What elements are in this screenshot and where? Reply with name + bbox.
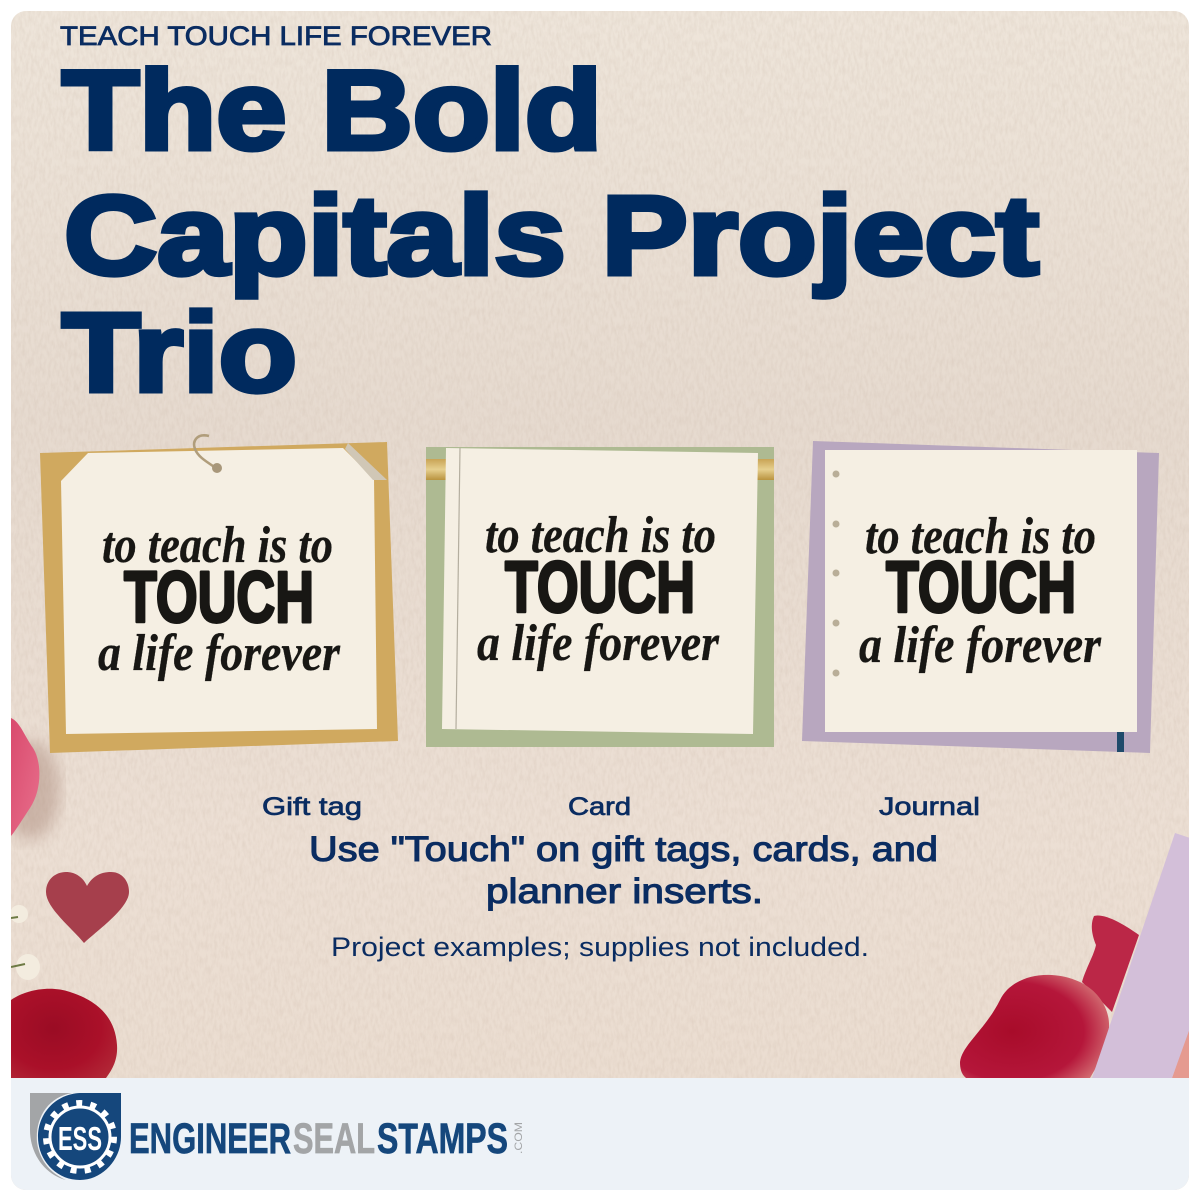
tape	[345, 443, 387, 480]
project labels	[262, 793, 980, 821]
title	[62, 48, 1039, 415]
icon: pink paper corner	[1172, 1028, 1189, 1078]
stamp text: TOUCH	[886, 548, 1076, 628]
logo	[30, 1093, 525, 1180]
hook and pin	[194, 435, 222, 473]
wordmark: ENGINEER	[129, 1115, 291, 1163]
stamp text: to teach is to	[865, 508, 1096, 565]
project labels: Gift tag	[262, 793, 362, 821]
usage caption	[309, 830, 938, 911]
icon: heart	[46, 872, 129, 943]
title: The Bold	[62, 48, 602, 173]
icon: ESS seal	[30, 1093, 121, 1180]
wordmark	[129, 1115, 525, 1163]
gold band	[426, 459, 774, 480]
stamp text: a life forever	[98, 625, 341, 682]
stamp text	[477, 507, 720, 672]
stamp text: TOUCH	[124, 558, 314, 638]
stamp text: to teach is to	[102, 517, 333, 574]
icon: white flowers	[10, 905, 40, 980]
stamp text: a life forever	[859, 617, 1102, 674]
title: Capitals Project	[64, 173, 1039, 298]
bookmark	[1117, 732, 1124, 752]
icon: dark pink petal	[1082, 916, 1139, 1012]
wordmark: .COM	[513, 1122, 525, 1154]
footer band	[11, 1078, 1189, 1190]
usage caption: planner inserts.	[486, 872, 763, 911]
panel: journal	[802, 441, 1159, 753]
fold line	[456, 448, 460, 729]
title: Trio	[62, 290, 297, 415]
project labels: Journal	[879, 793, 980, 821]
icon: red petal	[960, 975, 1109, 1078]
wordmark: SEAL	[293, 1115, 375, 1163]
disclaimer: Project examples; supplies not included.	[331, 932, 869, 962]
panel: gift tag	[40, 435, 398, 753]
decoration: right petals and lavender paper	[960, 833, 1190, 1078]
icon: ESS seal: ESS	[58, 1120, 102, 1157]
stamp text	[859, 508, 1102, 674]
icon: red petal bottom left	[11, 989, 117, 1078]
icon: pink petal	[11, 718, 39, 836]
stamp text	[98, 517, 341, 682]
panel: card	[426, 447, 774, 747]
usage caption: Use "Touch" on gift tags, cards, and	[309, 830, 938, 869]
card paper	[442, 448, 758, 734]
stamp text: TOUCH	[505, 548, 695, 628]
decoration: left petals, heart and flowers	[0, 718, 129, 1078]
wordmark: STAMPS	[377, 1115, 508, 1163]
project labels: Card	[568, 793, 631, 821]
journal paper	[825, 450, 1137, 732]
tag paper	[61, 448, 377, 734]
eyebrow: TEACH TOUCH LIFE FOREVER	[60, 21, 492, 51]
icon: lavender paper	[1092, 833, 1190, 1078]
stamp text: to teach is to	[485, 507, 716, 564]
stamp text: a life forever	[477, 615, 720, 672]
punched holes	[832, 470, 840, 676]
